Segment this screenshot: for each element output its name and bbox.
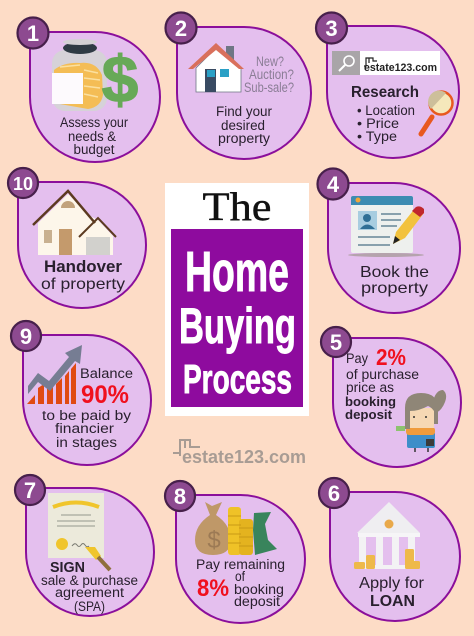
text: assess: budget [74,142,115,157]
badge 7 [15,475,45,505]
text: find your desired property [216,104,272,146]
badge 7: 7 [24,478,36,503]
list: research factors [357,102,415,144]
panel: step 8 pay remaining [176,495,305,623]
text: sign: SIGN [50,560,85,576]
text: of purchase price: price as [346,380,394,395]
badge 3 [316,12,347,44]
text: booking deposit: booking [234,582,284,597]
text: booking deposit: booking [345,394,396,409]
panel: step 4 book [328,183,460,313]
text: assess: Assess your [60,115,128,130]
badge 10 [8,168,38,198]
panel: step 3 research [327,26,459,158]
text: assess [60,115,128,157]
title: Process: Process [183,356,292,402]
text: pay remaining: Pay remaining [196,557,285,572]
badge 8 [165,481,195,511]
text: agreement: (SPA) [74,599,105,614]
badge 1: 1 [27,21,39,46]
watermark logo [173,440,306,467]
badge 2 [166,12,196,44]
text: new auction sub-sale: Sub-sale? [244,80,294,95]
text: pay: Pay [346,351,368,366]
icon: magnifying glass [421,91,452,134]
list: research factors: • Price [357,115,399,131]
icon: profile form with pencil [348,196,424,257]
list: research factors: • Location [357,102,415,118]
search bar: estate123.com [364,62,437,74]
badge 9: 9 [20,324,32,349]
text: booking deposit: deposit [345,407,393,422]
text: financier: financier [55,421,115,436]
panel: step 1 assess [30,32,160,162]
text: 2 percent: 2% [376,344,406,370]
text: financier [42,408,131,450]
text: 8 percent: 8% [197,575,229,602]
text: book the property: property [361,280,428,297]
text: find your desired property: Find your [216,104,272,119]
text: of property: of property [41,276,125,293]
title: Home: Home [185,240,289,304]
text: assess: needs & [68,129,116,144]
icon: house with garage [33,191,116,255]
text: balance: Balance [80,366,133,381]
text: booking deposit [345,394,396,422]
text: agreement [41,573,138,614]
text: new auction sub-sale: New? [256,54,284,69]
text: agreement: agreement [55,585,124,600]
panel: step 2 find [177,27,311,159]
text: financier: to be paid by [42,408,131,423]
text: research: Research [351,84,419,101]
badge 9 [11,321,41,351]
panel: step 7 sign [26,488,154,616]
badge 6: 6 [328,481,340,506]
badge 10: 10 [13,174,33,194]
badge 4 [318,168,348,200]
text: new auction sub-sale: Auction? [249,67,294,82]
center title panel [165,183,309,416]
text: booking deposit [234,582,284,609]
text: financier: in stages [56,435,117,450]
title: The: The [202,184,272,229]
badge 6 [319,478,349,508]
text: book the property [360,264,429,297]
text: book the property: Book the [360,264,429,281]
panel: step 10 handover [18,182,146,308]
badge 5 [321,327,351,357]
text: booking deposit: deposit [234,594,280,609]
panel: step 5 pay [333,338,461,467]
badge 2: 2 [175,16,187,41]
list: research factors: • Type [357,128,397,144]
icon: dollar sign: $ [102,42,138,116]
panel: step 9 balance [23,335,151,465]
badge 4: 4 [327,172,340,197]
icon: certificate with pen [48,493,110,570]
badge 3: 3 [325,16,338,41]
icon: woman holding money [396,390,446,452]
icon: house [188,43,244,92]
badge 1 [18,18,48,48]
icon: bank with coins [354,502,420,569]
text: new auction sub-sale [244,54,294,95]
icon: money bag and coins: $ [207,527,221,554]
text: of: of [235,569,245,584]
badge 5: 5 [330,330,342,355]
icon: rising bar chart [27,363,76,404]
icon: coin jar [52,39,107,111]
text: find your desired property: property [218,131,270,146]
watermark logo: estate123.com [182,447,306,467]
text: loan: LOAN [370,593,415,610]
text: of purchase price [346,367,419,395]
badge 8: 8 [174,484,186,509]
text: apply for: Apply for [359,575,424,592]
text: of purchase price: of purchase [346,367,419,382]
title: Buying: Buying [179,298,296,354]
panel: step 6 loan [330,492,460,621]
text: agreement: sale & purchase [41,573,138,588]
icon: rising arrow [28,345,82,394]
text: find your desired property: desired [221,118,265,133]
text: 90 percent: 90% [81,381,129,409]
text: handover: Handover [44,258,123,276]
